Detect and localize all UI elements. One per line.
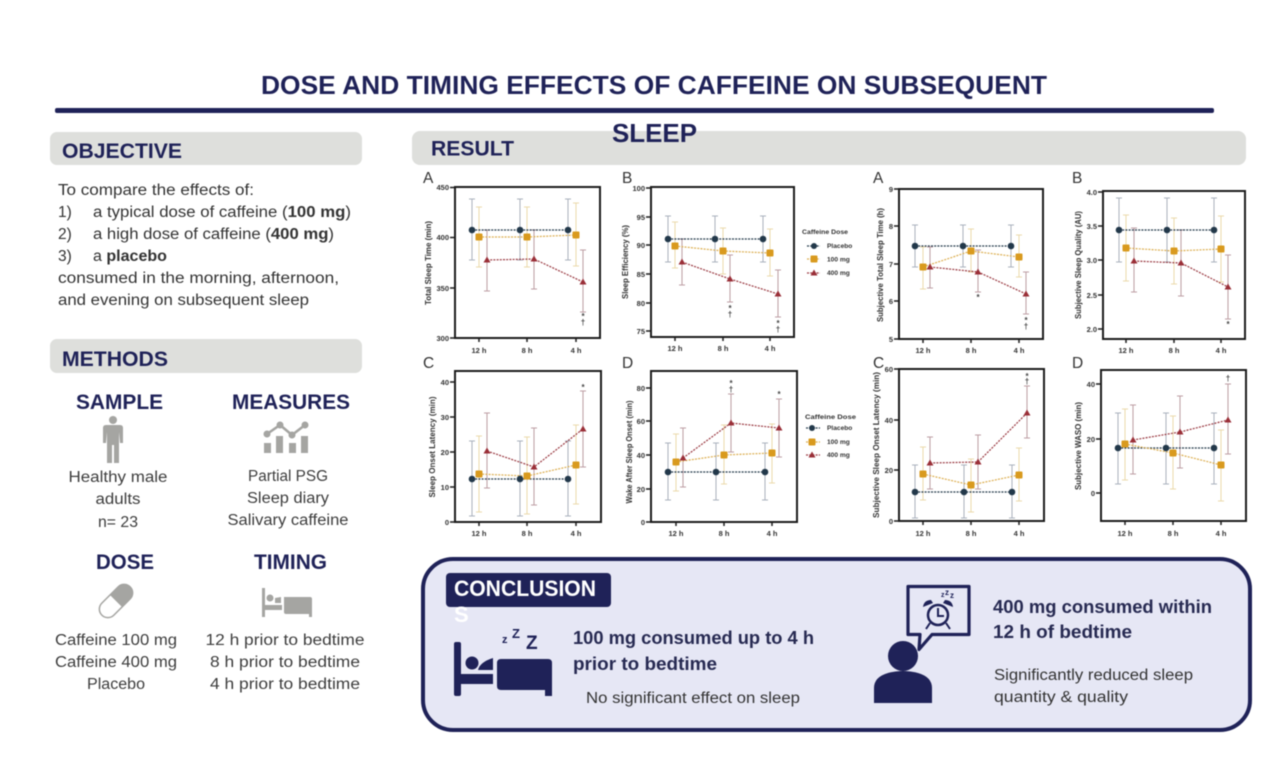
dose block: Caffeine 100 mg (55, 632, 177, 649)
chart: subjective total sleep time: 6 (889, 297, 893, 306)
chart: sleep onset latency: * (581, 383, 585, 392)
chart: subjective sleep quality (1072, 170, 1245, 355)
chart: subjective WASO: 20 (1087, 435, 1095, 444)
icon: person (103, 416, 123, 463)
measures block: Salivary caffeine (228, 512, 348, 529)
chart: subjective sleep quality: 3.0 (1087, 256, 1097, 265)
chart: subjective sleep onset latency: 40 (885, 416, 893, 425)
measures block: Sleep diary (247, 490, 329, 507)
chart: wake after sleep onset: D (622, 355, 633, 372)
objective text: a typical dose of caffeine ( 100 mg ) (93, 204, 351, 221)
chart: subjective sleep onset latency: † (1025, 377, 1029, 386)
chart: total sleep time: 400 (436, 233, 449, 242)
chart: sleep efficiency: 12 h (667, 344, 683, 353)
objective text: 1) (58, 204, 72, 221)
chart: subjective WASO: Subjective WASO (min) (1074, 402, 1083, 490)
chart: subjective WASO: 0 (1091, 489, 1095, 498)
icon: person thinking of alarm clock (874, 586, 969, 703)
legend: caffeine dose top: Caffeine Dose (802, 229, 848, 236)
chart: subjective sleep quality: 8 h (1169, 346, 1180, 355)
sample block: Healthy male (68, 469, 168, 486)
chart: wake after sleep onset: * (729, 379, 733, 388)
legend: caffeine dose top: Placebo (827, 243, 852, 250)
methods heading: METHODS (62, 348, 168, 371)
chart: sleep onset latency: 20 (441, 448, 449, 457)
legend: caffeine dose bottom: Placebo (827, 425, 852, 432)
chart: total sleep time: 450 (436, 183, 449, 192)
chart: sleep efficiency: 85 (637, 270, 645, 279)
chart: sleep efficiency: * (776, 319, 780, 328)
chart: subjective WASO: D (1072, 355, 1083, 372)
panel: conclusions (423, 559, 1250, 730)
chart: subjective sleep quality: Subjective Sleep Quality (AU) (1074, 211, 1083, 319)
chart: wake after sleep onset: * (777, 390, 781, 399)
chart: subjective total sleep time: * (976, 293, 980, 302)
conclusion text: 100 mg: 100 mg consumed up to 4 h (573, 628, 814, 648)
chart: total sleep time: * (581, 312, 585, 321)
dose block (55, 551, 177, 693)
chart: subjective sleep quality: B (1072, 170, 1082, 187)
chart: sleep onset latency: 8 h (522, 529, 533, 538)
chart: wake after sleep onset: 20 (637, 485, 645, 494)
chart: sleep efficiency: 80 (637, 299, 645, 308)
chart: sleep onset latency: Sleep Onset Latency (min) (428, 396, 437, 498)
objective text: 2) (58, 226, 72, 243)
dose block: Caffeine 400 mg (55, 654, 177, 671)
chart: wake after sleep onset: Wake After Sleep Onset (min) (625, 400, 634, 504)
title: DOSE AND TIMING EFFECTS OF CAFFEINE ON SUBSEQUENT (261, 72, 1047, 100)
objective text: 3) (58, 248, 72, 265)
conclusions heading: CONCLUSION (454, 576, 596, 601)
chart: total sleep time: 8 h (522, 346, 533, 355)
chart: subjective total sleep time: 5 (889, 335, 893, 344)
sample block (68, 391, 168, 531)
chart: subjective WASO: 12 h (1117, 529, 1133, 538)
icon: sleeping person in bed: z (502, 634, 508, 646)
chart: subjective sleep quality: 4.0 (1087, 188, 1097, 197)
objective heading: OBJECTIVE (62, 140, 182, 163)
objective text: consumed in the morning, afternoon, (58, 270, 339, 287)
chart: subjective sleep quality: * (1226, 320, 1230, 329)
conclusions heading (446, 573, 611, 627)
chart: subjective total sleep time: 9 (889, 185, 893, 194)
legend: caffeine dose bottom (805, 414, 856, 459)
icon: pill (96, 581, 136, 621)
chart: sleep efficiency: B (622, 170, 632, 187)
icon: person thinking of alarm clock: z (950, 591, 954, 600)
chart: subjective total sleep time: Subjective Total Sleep Time (h) (876, 208, 885, 322)
timing block (206, 551, 364, 693)
chart: subjective sleep onset latency: * (1025, 372, 1029, 381)
chart: wake after sleep onset: † (729, 385, 733, 394)
chart: subjective WASO: 8 h (1168, 529, 1179, 538)
chart: wake after sleep onset: 12 h (668, 529, 684, 538)
chart: wake after sleep onset: 60 (637, 417, 645, 426)
chart: subjective sleep onset latency: C (873, 355, 884, 372)
chart: sleep efficiency: 100 (632, 184, 645, 193)
sample block: adults (96, 491, 141, 508)
panel bar: result (412, 131, 1246, 165)
chart: sleep onset latency: 40 (441, 378, 449, 387)
chart: sleep efficiency: † (776, 325, 780, 334)
chart: sleep efficiency: 90 (637, 241, 645, 250)
chart: subjective sleep quality: 4 h (1216, 346, 1227, 355)
panel: objective (50, 132, 362, 309)
chart: subjective sleep onset latency (872, 355, 1044, 538)
chart: total sleep time: 12 h (471, 346, 487, 355)
icon: sleeping person in bed: Z (526, 633, 538, 654)
chart: subjective sleep quality: 2.0 (1087, 325, 1097, 334)
chart: sleep efficiency: * (728, 304, 732, 313)
methods heading (50, 339, 362, 373)
chart: sleep efficiency: 8 h (718, 344, 729, 353)
panel: methods (50, 339, 364, 693)
chart: subjective total sleep time: 8 h (966, 346, 977, 355)
dose block: Placebo (87, 676, 145, 693)
legend: caffeine dose bottom: 100 mg (827, 439, 850, 446)
chart: wake after sleep onset: 0 (641, 518, 645, 527)
icon: chart (264, 422, 308, 453)
conclusion text: 400 mg: 400 mg consumed within (993, 597, 1212, 617)
icon: person thinking of alarm clock: z (941, 592, 945, 599)
conclusion text: 400 mg (993, 597, 1212, 706)
chart: subjective total sleep time (873, 170, 1043, 355)
chart: wake after sleep onset: 4 h (767, 529, 778, 538)
icon: person thinking of alarm clock: z (945, 588, 949, 597)
objective heading (50, 132, 362, 165)
icon: sleeping person in bed (454, 626, 552, 696)
objective text (58, 182, 351, 309)
chart: sleep onset latency: 10 (441, 483, 449, 492)
chart: wake after sleep onset (622, 355, 797, 538)
chart: subjective sleep quality: 12 h (1118, 346, 1134, 355)
legend: caffeine dose bottom: 400 mg (827, 452, 850, 459)
chart: wake after sleep onset: 80 (637, 384, 645, 393)
chart: subjective total sleep time: * (1024, 316, 1028, 325)
conclusion text: 100 mg (573, 628, 814, 707)
chart: subjective total sleep time: 8 (889, 222, 893, 231)
conclusion text: 100 mg: prior to bedtime (573, 654, 717, 674)
chart: total sleep time: † (581, 318, 585, 327)
legend: caffeine dose top: 400 mg (827, 270, 850, 277)
conclusion text: 400 mg: quantity & quality (994, 689, 1128, 706)
chart: subjective sleep onset latency: 12 h (915, 529, 931, 538)
conclusion text: 400 mg: 12 h of bedtime (993, 622, 1132, 642)
legend: caffeine dose top: 100 mg (827, 256, 850, 264)
timing block: 4 h prior to bedtime (210, 676, 360, 693)
chart: sleep efficiency: Sleep Efficiency (%) (621, 225, 630, 299)
chart: total sleep time: 300 (436, 334, 449, 343)
chart: subjective WASO: † (1226, 374, 1230, 383)
chart: sleep onset latency (423, 355, 601, 538)
sample block: n= 23 (98, 514, 138, 531)
chart: subjective total sleep time: 4 h (1014, 346, 1025, 355)
chart: sleep onset latency: 30 (441, 413, 449, 422)
legend: caffeine dose top (802, 229, 852, 277)
chart: subjective sleep onset latency: 8 h (966, 529, 977, 538)
measures block (228, 391, 350, 529)
chart: subjective sleep onset latency: 4 h (1014, 529, 1025, 538)
timing block: 8 h prior to bedtime (210, 654, 360, 671)
conclusion text: 100 mg: No significant effect on sleep (586, 690, 800, 707)
chart: sleep onset latency: C (423, 355, 434, 372)
icon: bed (262, 588, 312, 617)
title rule (55, 108, 1214, 113)
icon: sleeping person in bed: Z (512, 626, 520, 641)
conclusions heading: S (454, 602, 469, 627)
timing block: 12 h prior to bedtime (206, 632, 364, 649)
objective text: and evening on subsequent sleep (58, 292, 309, 309)
chart: wake after sleep onset: 40 (637, 451, 645, 460)
title (261, 72, 1047, 148)
chart: subjective total sleep time: † (1024, 322, 1028, 331)
chart: subjective sleep quality: 2.5 (1087, 291, 1097, 300)
chart: total sleep time: 350 (436, 284, 449, 293)
chart: sleep onset latency: 0 (445, 518, 449, 527)
conclusion text: 400 mg: Significantly reduced sleep (994, 667, 1193, 684)
legend: caffeine dose bottom: Caffeine Dose (805, 414, 856, 421)
objective text: To compare the effects of: (58, 182, 254, 199)
chart: subjective sleep onset latency: Subjective Sleep Onset Latency (min) (872, 372, 881, 518)
chart: total sleep time: 4 h (571, 346, 582, 355)
chart: sleep efficiency (621, 170, 794, 353)
chart: subjective total sleep time: 7 (889, 260, 893, 269)
panel bar: result: RESULT (431, 138, 514, 160)
chart: subjective sleep onset latency: 0 (889, 517, 893, 526)
chart: sleep efficiency: † (728, 310, 732, 319)
chart: subjective total sleep time: A (873, 170, 884, 187)
title: SLEEP (612, 120, 697, 148)
chart: subjective sleep onset latency: 60 (885, 365, 893, 374)
chart: subjective WASO (1072, 355, 1246, 538)
chart: total sleep time (423, 170, 600, 355)
chart: sleep efficiency: 4 h (765, 344, 776, 353)
chart: subjective sleep onset latency: 20 (885, 466, 893, 475)
chart: wake after sleep onset: 8 h (719, 529, 730, 538)
chart: total sleep time: A (423, 170, 434, 187)
chart: subjective total sleep time: 12 h (915, 346, 931, 355)
dose block: DOSE (96, 551, 154, 574)
measures block: MEASURES (232, 391, 350, 414)
chart: subjective WASO: 40 (1087, 380, 1095, 389)
chart: sleep onset latency: 4 h (571, 529, 582, 538)
measures block: Partial PSG (248, 468, 328, 485)
timing block: TIMING (254, 551, 327, 574)
objective text: a high dose of caffeine ( 400 mg ) (93, 226, 334, 243)
chart: sleep onset latency: 12 h (471, 529, 487, 538)
chart: sleep efficiency: 75 (637, 327, 645, 336)
chart: subjective WASO: 4 h (1216, 529, 1227, 538)
chart: sleep efficiency: 95 (637, 213, 645, 222)
chart: subjective sleep quality: 3.5 (1087, 222, 1097, 231)
sample block: SAMPLE (76, 391, 163, 414)
chart: total sleep time: Total Sleep Time (min) (424, 221, 433, 305)
objective text: a placebo (93, 248, 167, 265)
